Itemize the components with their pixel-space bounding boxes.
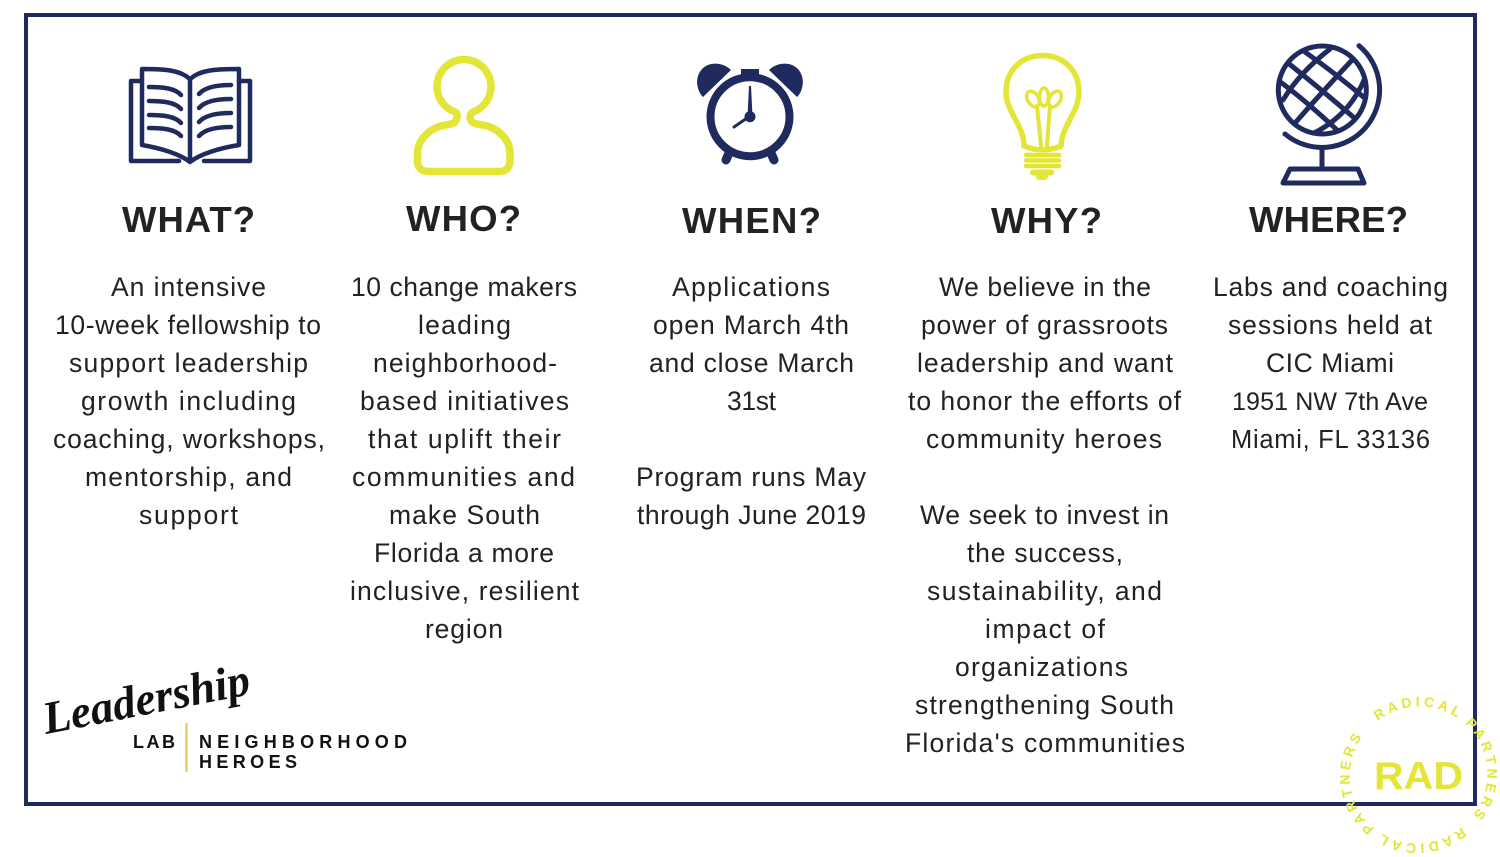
icon: desk globe [1278, 46, 1380, 183]
badge centre letters: RAD [1374, 755, 1463, 798]
logo neighborhood heroes label: HEROES [199, 752, 297, 772]
logo: leadership lab neighborhood heroes [37, 654, 407, 772]
text: who description: that uplift their [368, 424, 561, 454]
logo neighborhood heroes label: NEIGHBORHOOD [199, 732, 407, 752]
text: why description: community heroes [926, 424, 1162, 454]
badge circular text: RADICALPARTNERS RADICALPARTNERS [1340, 696, 1497, 853]
column: when [636, 64, 867, 530]
heading: where: WHERE? [1249, 199, 1408, 240]
text: why description: We believe in the [939, 272, 1151, 302]
text: why description: leadership and want [917, 348, 1174, 378]
text: why description: to honor the efforts of [908, 386, 1182, 416]
text: who description: communities and [352, 462, 575, 492]
text: why description: impact of [985, 614, 1106, 644]
logo script wordmark: Leadership [37, 654, 254, 744]
text: when description: Program runs May [636, 462, 867, 492]
icon: open book [131, 69, 250, 162]
column: what [53, 69, 325, 530]
text: what description: mentorship, and [85, 462, 292, 492]
heading: when: WHEN? [682, 200, 821, 241]
text: why description: power of grassroots [921, 310, 1168, 340]
text: who description: 10 change makers [351, 272, 577, 302]
text: when description: 31st [727, 386, 777, 416]
text: who description: region [425, 614, 503, 644]
logo gold divider [186, 723, 188, 772]
text: who description [350, 272, 580, 644]
text: why description: Florida's communities [905, 728, 1185, 758]
text: when description: Applications [672, 272, 830, 302]
text: why description [905, 272, 1185, 758]
text: who description: leading [418, 310, 511, 340]
text: who description: inclusive, resilient [350, 576, 580, 606]
text: what description [53, 272, 325, 530]
icon: alarm clock [697, 64, 803, 162]
text: why description: organizations [955, 652, 1128, 682]
text: what description: support leadership [69, 348, 308, 378]
icon: person [418, 60, 510, 172]
text: what description: 10-week fellowship to [55, 310, 321, 340]
text: why description: strengthening South [915, 690, 1174, 720]
text: why description: We seek to invest in [920, 500, 1169, 530]
text: where description: CIC Miami [1266, 348, 1394, 378]
text: when description: and close March [649, 348, 854, 378]
logo lab label: LAB [133, 732, 175, 752]
heading: what: WHAT? [122, 199, 255, 240]
text: where description: Miami, FL 33136 [1231, 426, 1430, 454]
heading: who: WHO? [406, 198, 521, 239]
text: what description: support [139, 500, 239, 530]
column: why [905, 56, 1185, 758]
text: where description [1213, 272, 1448, 454]
text: why description: the success, [967, 538, 1123, 568]
text: why description: sustainability, and [927, 576, 1162, 606]
text: who description: neighborhood- [373, 348, 557, 378]
text: where description: Labs and coaching [1213, 272, 1448, 302]
text: who description: make South [389, 500, 540, 530]
logo: radical partners badge [1340, 696, 1497, 853]
text: when description: open March 4th [653, 310, 849, 340]
text: when description: through June 2019 [637, 500, 866, 530]
text: when description [636, 272, 867, 530]
text: what description: An intensive [111, 272, 266, 302]
text: what description: growth including [81, 386, 296, 416]
text: where description: 1951 NW 7th Ave [1232, 388, 1428, 416]
heading: why: WHY? [991, 200, 1102, 241]
text: where description: sessions held at [1228, 310, 1433, 340]
text: what description: coaching, workshops, [53, 424, 325, 454]
text: who description: based initiatives [360, 386, 569, 416]
column: where [1213, 46, 1448, 454]
column: who [350, 60, 580, 644]
text: who description: Florida a more [374, 538, 554, 568]
logo neighborhood heroes label [199, 732, 407, 772]
icon: light bulb [1006, 56, 1079, 177]
